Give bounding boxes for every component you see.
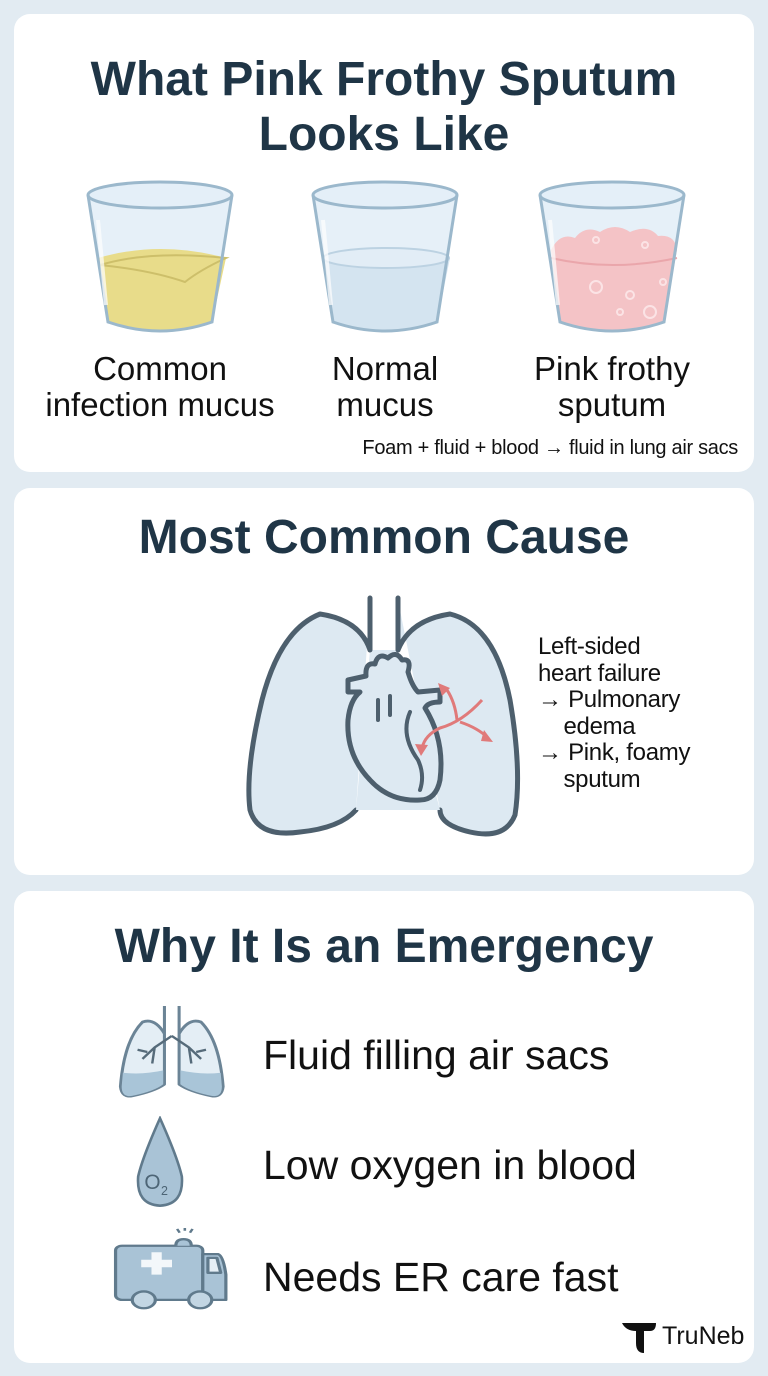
title: What Pink Frothy Sputum — [91, 53, 677, 106]
icon: yellow cup — [88, 182, 232, 331]
label: common infection mucus: infection mucus — [45, 386, 275, 423]
icon: O2 drop: O — [144, 1171, 161, 1194]
title: Most Common Cause — [139, 511, 629, 564]
title — [90, 53, 677, 161]
text: cause explanation: Left-sided — [538, 633, 640, 660]
panel: most common cause — [14, 488, 754, 875]
label: common infection mucus: Common — [93, 350, 227, 387]
label: pink frothy sputum: Pink frothy — [534, 350, 690, 387]
icon: ambulance — [114, 1228, 228, 1310]
text: cause explanation: heart failure — [538, 660, 661, 686]
panel: why emergency — [14, 891, 754, 1363]
logo: TruNeb — [622, 1322, 744, 1353]
row: fluid filling air sacs — [118, 1006, 609, 1098]
label: common infection mucus — [45, 350, 275, 423]
logo: TruNeb: TruNeb — [662, 1322, 744, 1350]
text: Fluid filling air sacs — [263, 1032, 609, 1078]
label: pink frothy sputum: sputum — [558, 386, 666, 423]
caption: Foam + fluid + blood → fluid in lung air sacs — [362, 437, 738, 459]
title: Looks Like — [259, 108, 509, 161]
text: cause explanation: → Pulmonary — [538, 686, 680, 713]
text: Needs ER care fast — [263, 1254, 618, 1300]
heart outline — [348, 654, 441, 800]
cups illustration — [86, 180, 686, 332]
text: cause explanation — [538, 633, 690, 792]
panel: what it looks like — [14, 14, 754, 472]
row: ER care — [114, 1228, 618, 1310]
row: low oxygen — [136, 1116, 637, 1207]
title: Why It Is an Emergency — [115, 920, 653, 973]
illustration: lungs and heart — [246, 596, 520, 836]
label: normal mucus — [332, 350, 438, 423]
icon: clear cup — [313, 182, 457, 331]
text: Low oxygen in blood — [263, 1142, 637, 1188]
icon: lungs — [118, 1006, 225, 1098]
text: cause explanation: edema — [563, 712, 635, 740]
label: normal mucus: mucus — [336, 386, 434, 423]
text: cause explanation: sputum — [563, 766, 640, 792]
icon: pink frothy cup — [540, 182, 684, 331]
label: pink frothy sputum — [534, 350, 690, 423]
label: normal mucus: Normal — [332, 350, 438, 387]
icon: O2 drop — [136, 1116, 184, 1207]
icon: O2 drop: 2 — [161, 1184, 168, 1198]
text: cause explanation: → Pink, foamy — [538, 739, 690, 766]
